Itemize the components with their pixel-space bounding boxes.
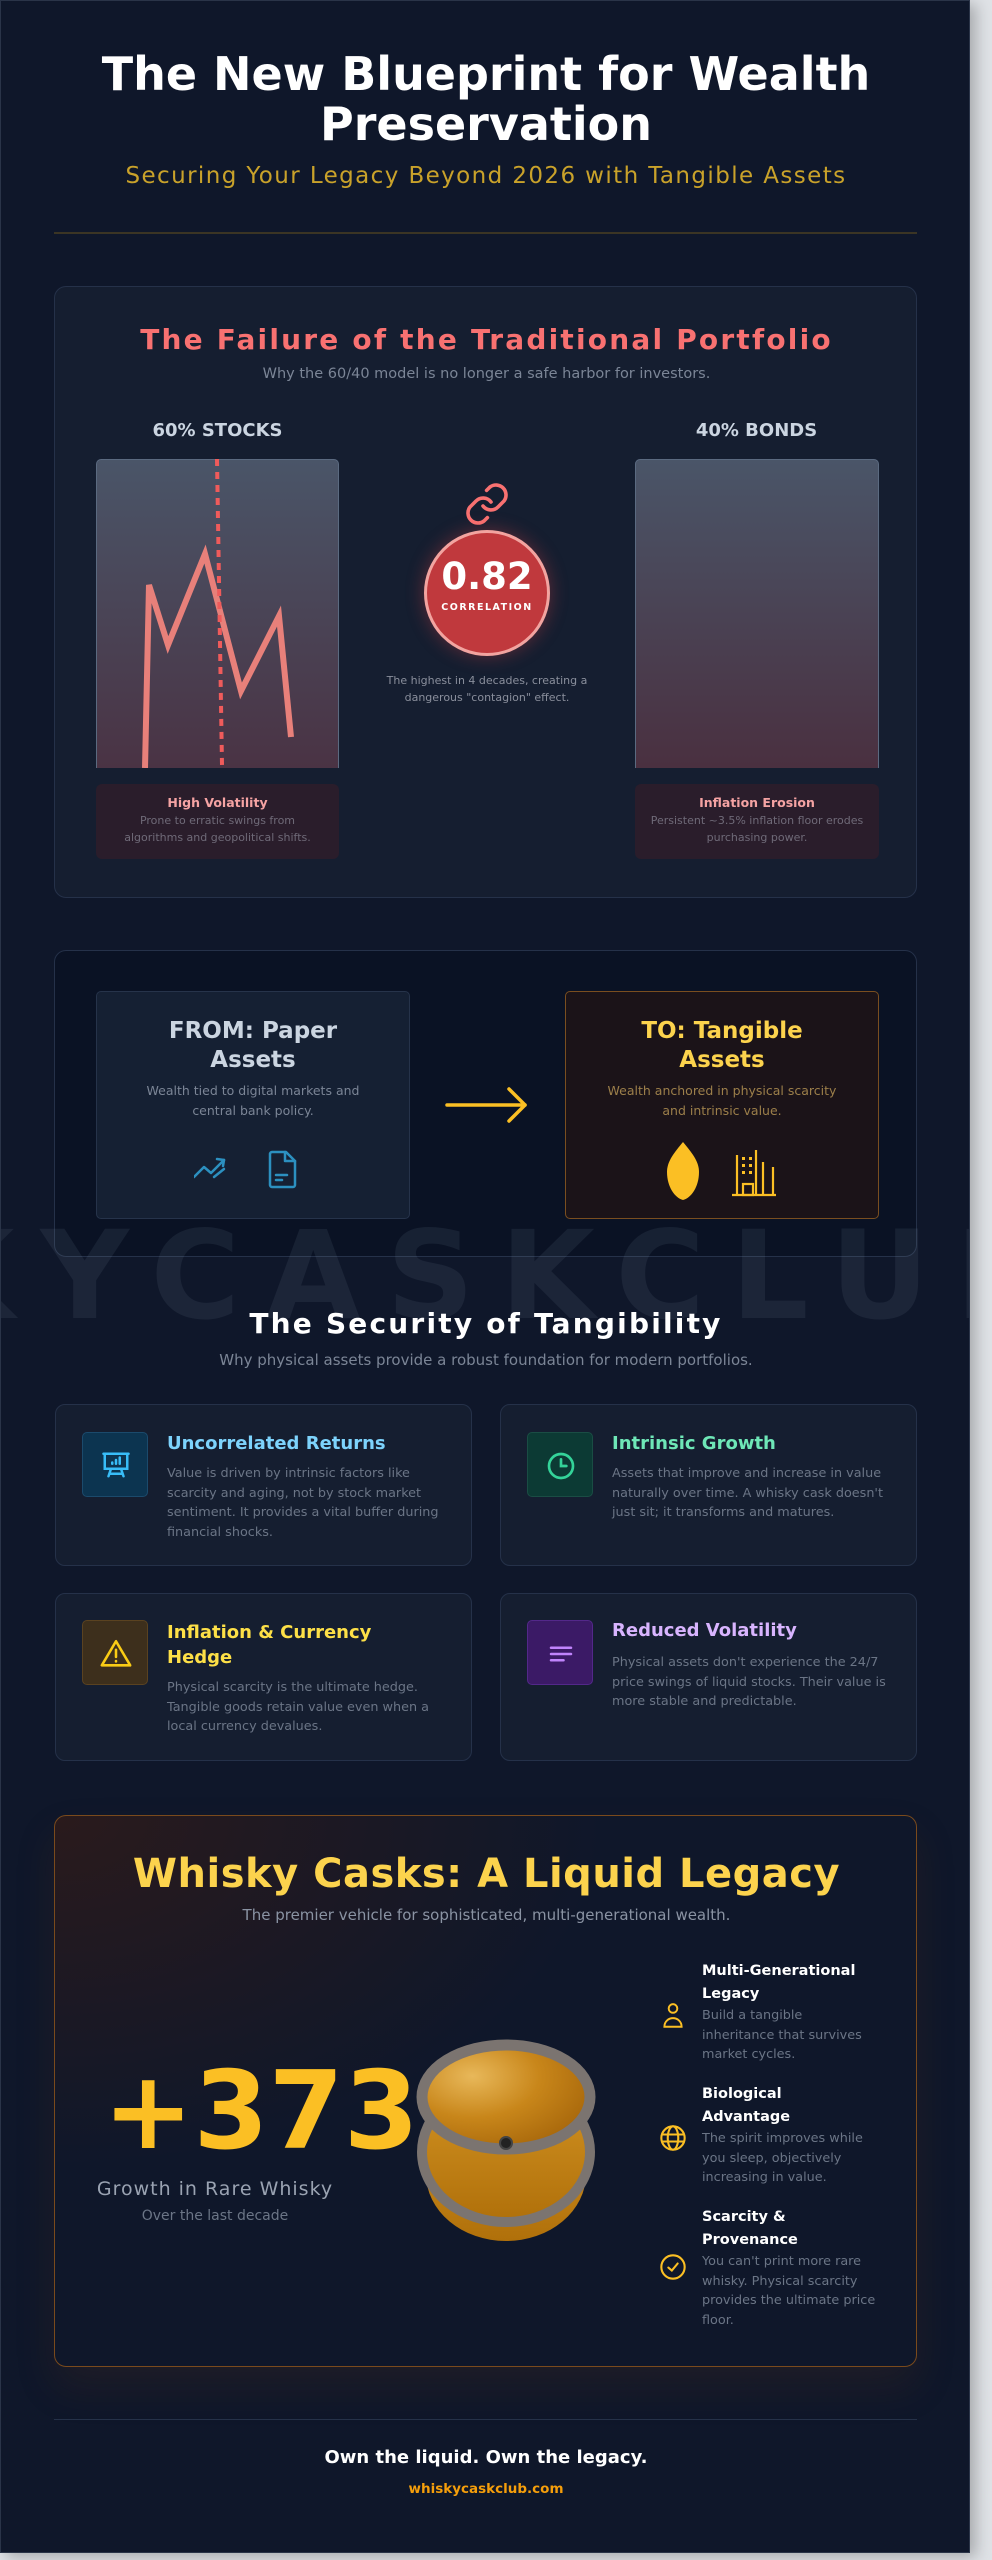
list item: multi-generational legacy <box>663 1963 862 2062</box>
box: to tangible assets <box>565 991 879 1219</box>
list item: biological advantage <box>660 2086 863 2185</box>
box: to tangible assets: Assets <box>679 1047 765 1073</box>
icon: cask <box>416 2040 596 2241</box>
card text: Physical scarcity is the ultimate hedge. Tangible goods retain value even when a local currency devalues. <box>167 1680 429 1734</box>
panel: whisky casks: Biological <box>702 2086 782 2102</box>
subtitle: Securing Your Legacy Beyond 2026 with Tangible Assets <box>126 163 846 189</box>
icon: warning <box>82 1620 148 1685</box>
caption: inflation erosion: Inflation Erosion <box>699 795 815 810</box>
box: to tangible assets: TO: Tangible <box>641 1018 803 1044</box>
panel: whisky casks: Build a tangible inheritance that survives market cycles. <box>702 2008 862 2062</box>
chart: stocks volatility <box>96 459 339 768</box>
label: stocks: 60% STOCKS <box>152 420 283 441</box>
card title: Inflation & Currency <box>167 1622 371 1643</box>
chart: bonds <box>635 459 879 768</box>
card: uncorrelated returns <box>55 1404 472 1566</box>
section heading: security of tangibility: The Security of Tangibility <box>249 1307 723 1340</box>
subtitle: The premier vehicle for sophisticated, multi-generational wealth. <box>243 1906 730 1924</box>
panel subtitle: Why the 60/40 model is no longer a safe harbor for investors. <box>263 366 710 382</box>
panel: whisky casks: Multi-Generational <box>702 1963 855 1979</box>
card title: Hedge <box>167 1647 232 1668</box>
card: reduced volatility <box>500 1593 917 1761</box>
panel: whisky casks: The spirit improves while you sleep, objectively increasing in value. <box>702 2131 863 2185</box>
card title: Uncorrelated Returns <box>167 1433 386 1454</box>
card text: Value is driven by intrinsic factors like scarcity and aging, not by stock market sentiment. It provides a vital buffer during financial shocks. <box>167 1466 439 1540</box>
footer url: whiskycaskclub.com <box>408 2481 564 2497</box>
list item: scarcity and provenance <box>660 2209 875 2328</box>
panel: failure of traditional portfolio <box>54 286 917 898</box>
card text: Physical assets don't experience the 24/7 price swings of liquid stocks. Their value is more stable and predictable. <box>612 1655 886 1709</box>
card: intrinsic growth <box>500 1404 917 1566</box>
section subtitle: Why physical assets provide a robust foundation for modern portfolios. <box>219 1351 753 1369</box>
caption: inflation erosion: purchasing power. <box>707 831 807 844</box>
caption: inflation erosion <box>635 784 879 859</box>
icon: clock <box>527 1432 593 1497</box>
box: to tangible assets: Wealth anchored in physical scarcity <box>608 1083 836 1098</box>
icon: lines <box>527 1620 593 1685</box>
card text: Assets that improve and increase in value naturally over time. A whisky cask doesn't just sit; it transforms and matures. <box>612 1466 883 1520</box>
icons: drop and distillery <box>667 1142 776 1200</box>
card title <box>167 1622 371 1668</box>
card title: Intrinsic Growth <box>612 1433 776 1454</box>
caption: inflation erosion: Persistent ~3.5% inflation floor erodes <box>651 814 863 827</box>
panel: whisky casks: Provenance <box>702 2232 798 2248</box>
box: from paper assets <box>96 991 410 1219</box>
box: from paper assets: central bank policy. <box>192 1103 314 1118</box>
correlation circle <box>424 530 550 656</box>
caption: high volatility: Prone to erratic swings from <box>140 814 295 827</box>
stat sublabel: Over the last decade <box>142 2208 288 2224</box>
box: from paper assets: Assets <box>210 1047 296 1073</box>
icon: chain link <box>466 483 508 525</box>
correlation circle: 0.82 <box>441 555 533 598</box>
caption: high volatility: algorithms and geopolitical shifts. <box>124 831 311 844</box>
arrow <box>445 1087 527 1123</box>
footer tagline: Own the liquid. Own the legacy. <box>324 2447 648 2468</box>
card title: Reduced Volatility <box>612 1620 797 1641</box>
title: The New Blueprint for Wealth <box>102 47 870 101</box>
panel: whisky casks: Advantage <box>702 2109 790 2125</box>
caption: high volatility: High Volatility <box>167 795 268 810</box>
icon: presentation chart <box>82 1432 148 1497</box>
title: Preservation <box>320 97 652 151</box>
title <box>102 47 870 151</box>
big stat: +373 <box>103 2049 419 2174</box>
label: bonds: 40% BONDS <box>696 420 817 441</box>
correlation circle: CORRELATION <box>441 602 533 613</box>
box: from paper assets: FROM: Paper <box>169 1018 337 1044</box>
stat label: Growth in Rare Whisky <box>97 2178 333 2200</box>
caption: high volatility <box>96 784 339 859</box>
icons: trend and document <box>194 1150 296 1188</box>
heading: Whisky Casks: A Liquid Legacy <box>133 1851 840 1897</box>
card: inflation hedge <box>55 1593 472 1761</box>
box: to tangible assets: and intrinsic value. <box>662 1103 782 1118</box>
panel: from paper to tangible <box>54 950 917 1257</box>
panel: whisky casks <box>54 1815 917 2367</box>
panel: whisky casks: You can't print more rare whisky. Physical scarcity provides the ultimate price floor. <box>702 2254 875 2328</box>
panel: whisky casks: Scarcity & <box>702 2209 786 2225</box>
box: from paper assets: Wealth tied to digital markets and <box>147 1083 359 1098</box>
correlation caption: The highest in 4 decades, creating a dangerous "contagion" effect. <box>387 674 587 704</box>
panel heading: The Failure of the Traditional Portfolio <box>140 323 833 356</box>
panel: whisky casks: Legacy <box>702 1986 759 2002</box>
